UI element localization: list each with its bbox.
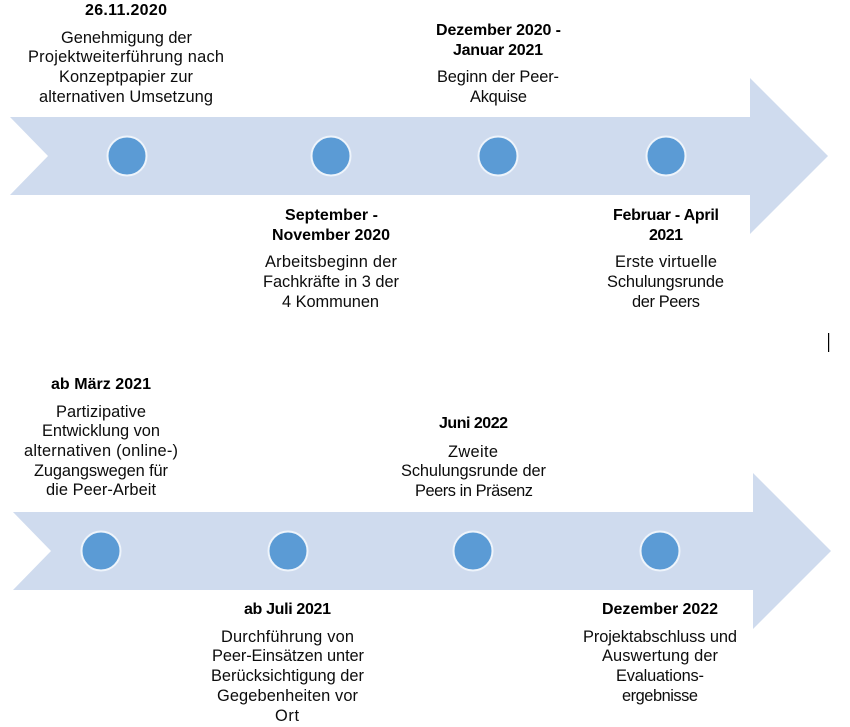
text block: Dezember 2020 - Januar 2021: [436, 22, 561, 106]
milestone marker Juni 2022: [454, 532, 492, 570]
text block: Juni 2022: Zweite: [448, 443, 498, 461]
text block: ab März 2021: [24, 376, 178, 499]
text block: Dezember 2022: ergebnisse: [622, 687, 698, 705]
timeline row 1: arrow with milestones: [10, 78, 828, 234]
text block: 26.11.2020: [28, 2, 224, 106]
text block: Dezember 2022: Projektabschluss und: [583, 628, 737, 646]
text block: Dezember 2020 - Januar 2021: Beginn der Peer-: [437, 68, 559, 86]
cursor mark: [828, 333, 829, 352]
arrow 1: [10, 78, 828, 234]
text block: ab Juli 2021: [211, 601, 365, 725]
milestone marker 26.11.2020: [108, 136, 146, 176]
text block: September - November 2020: [263, 207, 400, 311]
milestone marker September - November 2020: [312, 136, 350, 176]
text block: Dezember 2022: Auswertung der: [602, 647, 719, 665]
text block: ab Juli 2021: Gegebenheiten vor: [217, 687, 359, 705]
text block: September - November 2020: Fachkräfte in 3 der: [263, 273, 400, 291]
text block: ab März 2021: die Peer-Arbeit: [46, 481, 156, 499]
milestone marker ab Juli 2021: [268, 532, 308, 570]
text block: ab März 2021: Zugangswegen für: [34, 462, 169, 480]
text block: Februar - April 2021: 2021: [649, 227, 683, 244]
milestone marker Dezember 2022: [640, 532, 680, 570]
text block: 26.11.2020: Konzeptpapier zur: [59, 68, 194, 86]
text block: Juni 2022: Peers in Präsenz: [415, 482, 533, 500]
text block: ab März 2021: ab März 2021: [51, 376, 151, 393]
text block: Dezember 2020 - Januar 2021: Akquise: [470, 88, 527, 106]
text block: Dezember 2020 - Januar 2021: Januar 2021: [453, 42, 543, 59]
text block: ab März 2021: Partizipative: [56, 403, 146, 421]
text block: ab März 2021: alternativen (online-): [24, 442, 178, 460]
text block: ab Juli 2021: Ort: [275, 707, 299, 725]
text block: September - November 2020: 4 Kommunen: [282, 293, 379, 311]
text block: ab Juli 2021: Peer-Einsätzen unter: [212, 647, 365, 665]
text block: September - November 2020: November 2020: [272, 227, 390, 244]
text block: Dezember 2022: Dezember 2022: [602, 601, 718, 618]
milestone marker ab März 2021: [82, 532, 120, 570]
text block: ab Juli 2021: Berücksichtigung der: [211, 667, 365, 685]
text block: Februar - April 2021: Februar - April: [613, 207, 719, 224]
text block: Juni 2022: [401, 415, 547, 500]
text block: 26.11.2020: Projektweiterführung nach: [28, 48, 224, 66]
milestone marker Dezember 2020 - Januar 2021: [478, 136, 518, 176]
arrow 2: [13, 473, 831, 629]
text block: 26.11.2020: alternativen Umsetzung: [39, 88, 213, 106]
text block: Juni 2022: Schulungsrunde der: [401, 462, 547, 480]
text block: ab März 2021: Entwicklung von: [42, 422, 160, 440]
timeline row 2: arrow with milestones: [13, 473, 831, 629]
text block: Juni 2022: Juni 2022: [439, 415, 508, 432]
text block: ab Juli 2021: Durchführung von: [221, 628, 354, 646]
text block: Februar - April 2021: Erste virtuelle: [615, 253, 717, 271]
text block: 26.11.2020: Genehmigung der: [61, 29, 193, 47]
text block: Dezember 2022: [583, 601, 737, 705]
milestone marker Februar - April 2021: [646, 136, 686, 176]
text block: Dezember 2020 - Januar 2021: Dezember 2020 -: [436, 22, 561, 39]
text block: ab Juli 2021: ab Juli 2021: [244, 601, 331, 618]
text block: Februar - April 2021: [607, 207, 724, 311]
text block: 26.11.2020: 26.11.2020: [85, 2, 167, 19]
text block: Februar - April 2021: der Peers: [632, 293, 700, 311]
text block: September - November 2020: Arbeitsbeginn der: [265, 253, 398, 271]
text block: Februar - April 2021: Schulungsrunde: [607, 273, 724, 291]
text block: September - November 2020: September -: [285, 207, 378, 224]
text block: Dezember 2022: Evaluations-: [616, 667, 704, 685]
